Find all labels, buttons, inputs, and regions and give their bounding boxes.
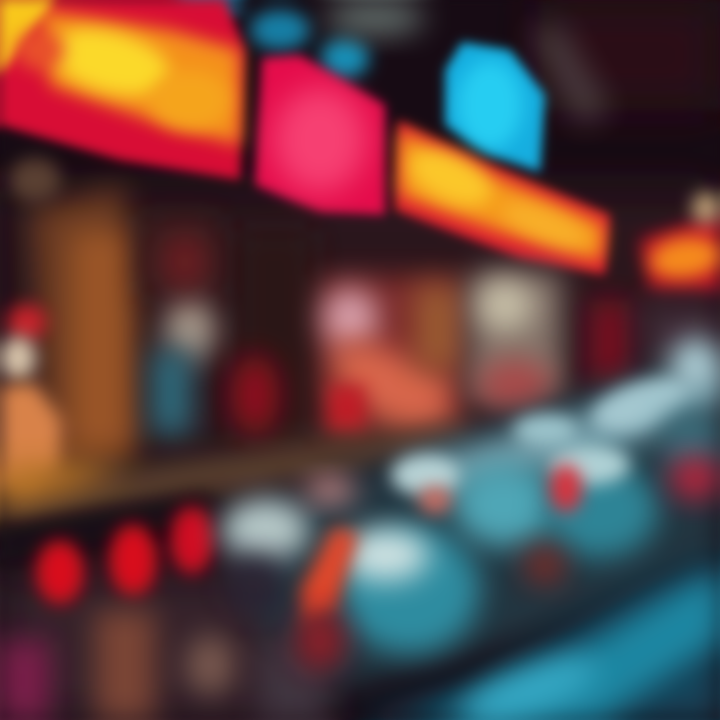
- orange sign: [395, 120, 610, 275]
- crowd of teal and white balls: [221, 337, 720, 690]
- central window with pink and orange shapes: [320, 275, 460, 435]
- teal rail at bottom right: [350, 555, 720, 720]
- left red and yellow sign: [0, 0, 245, 180]
- right small orange sign: [640, 192, 720, 292]
- storefront window figures: [150, 234, 279, 435]
- top strip of distant lights: [180, 0, 610, 125]
- left foreground figure: [0, 304, 62, 490]
- pink sign: [255, 55, 385, 215]
- storefront pillars: [9, 158, 315, 475]
- red lights: [36, 506, 214, 604]
- counter ledge: [0, 425, 470, 560]
- blue sign: [445, 42, 545, 172]
- red accents among balls: [294, 456, 720, 672]
- right window: [470, 272, 720, 411]
- lower left blurred floor: [0, 610, 330, 720]
